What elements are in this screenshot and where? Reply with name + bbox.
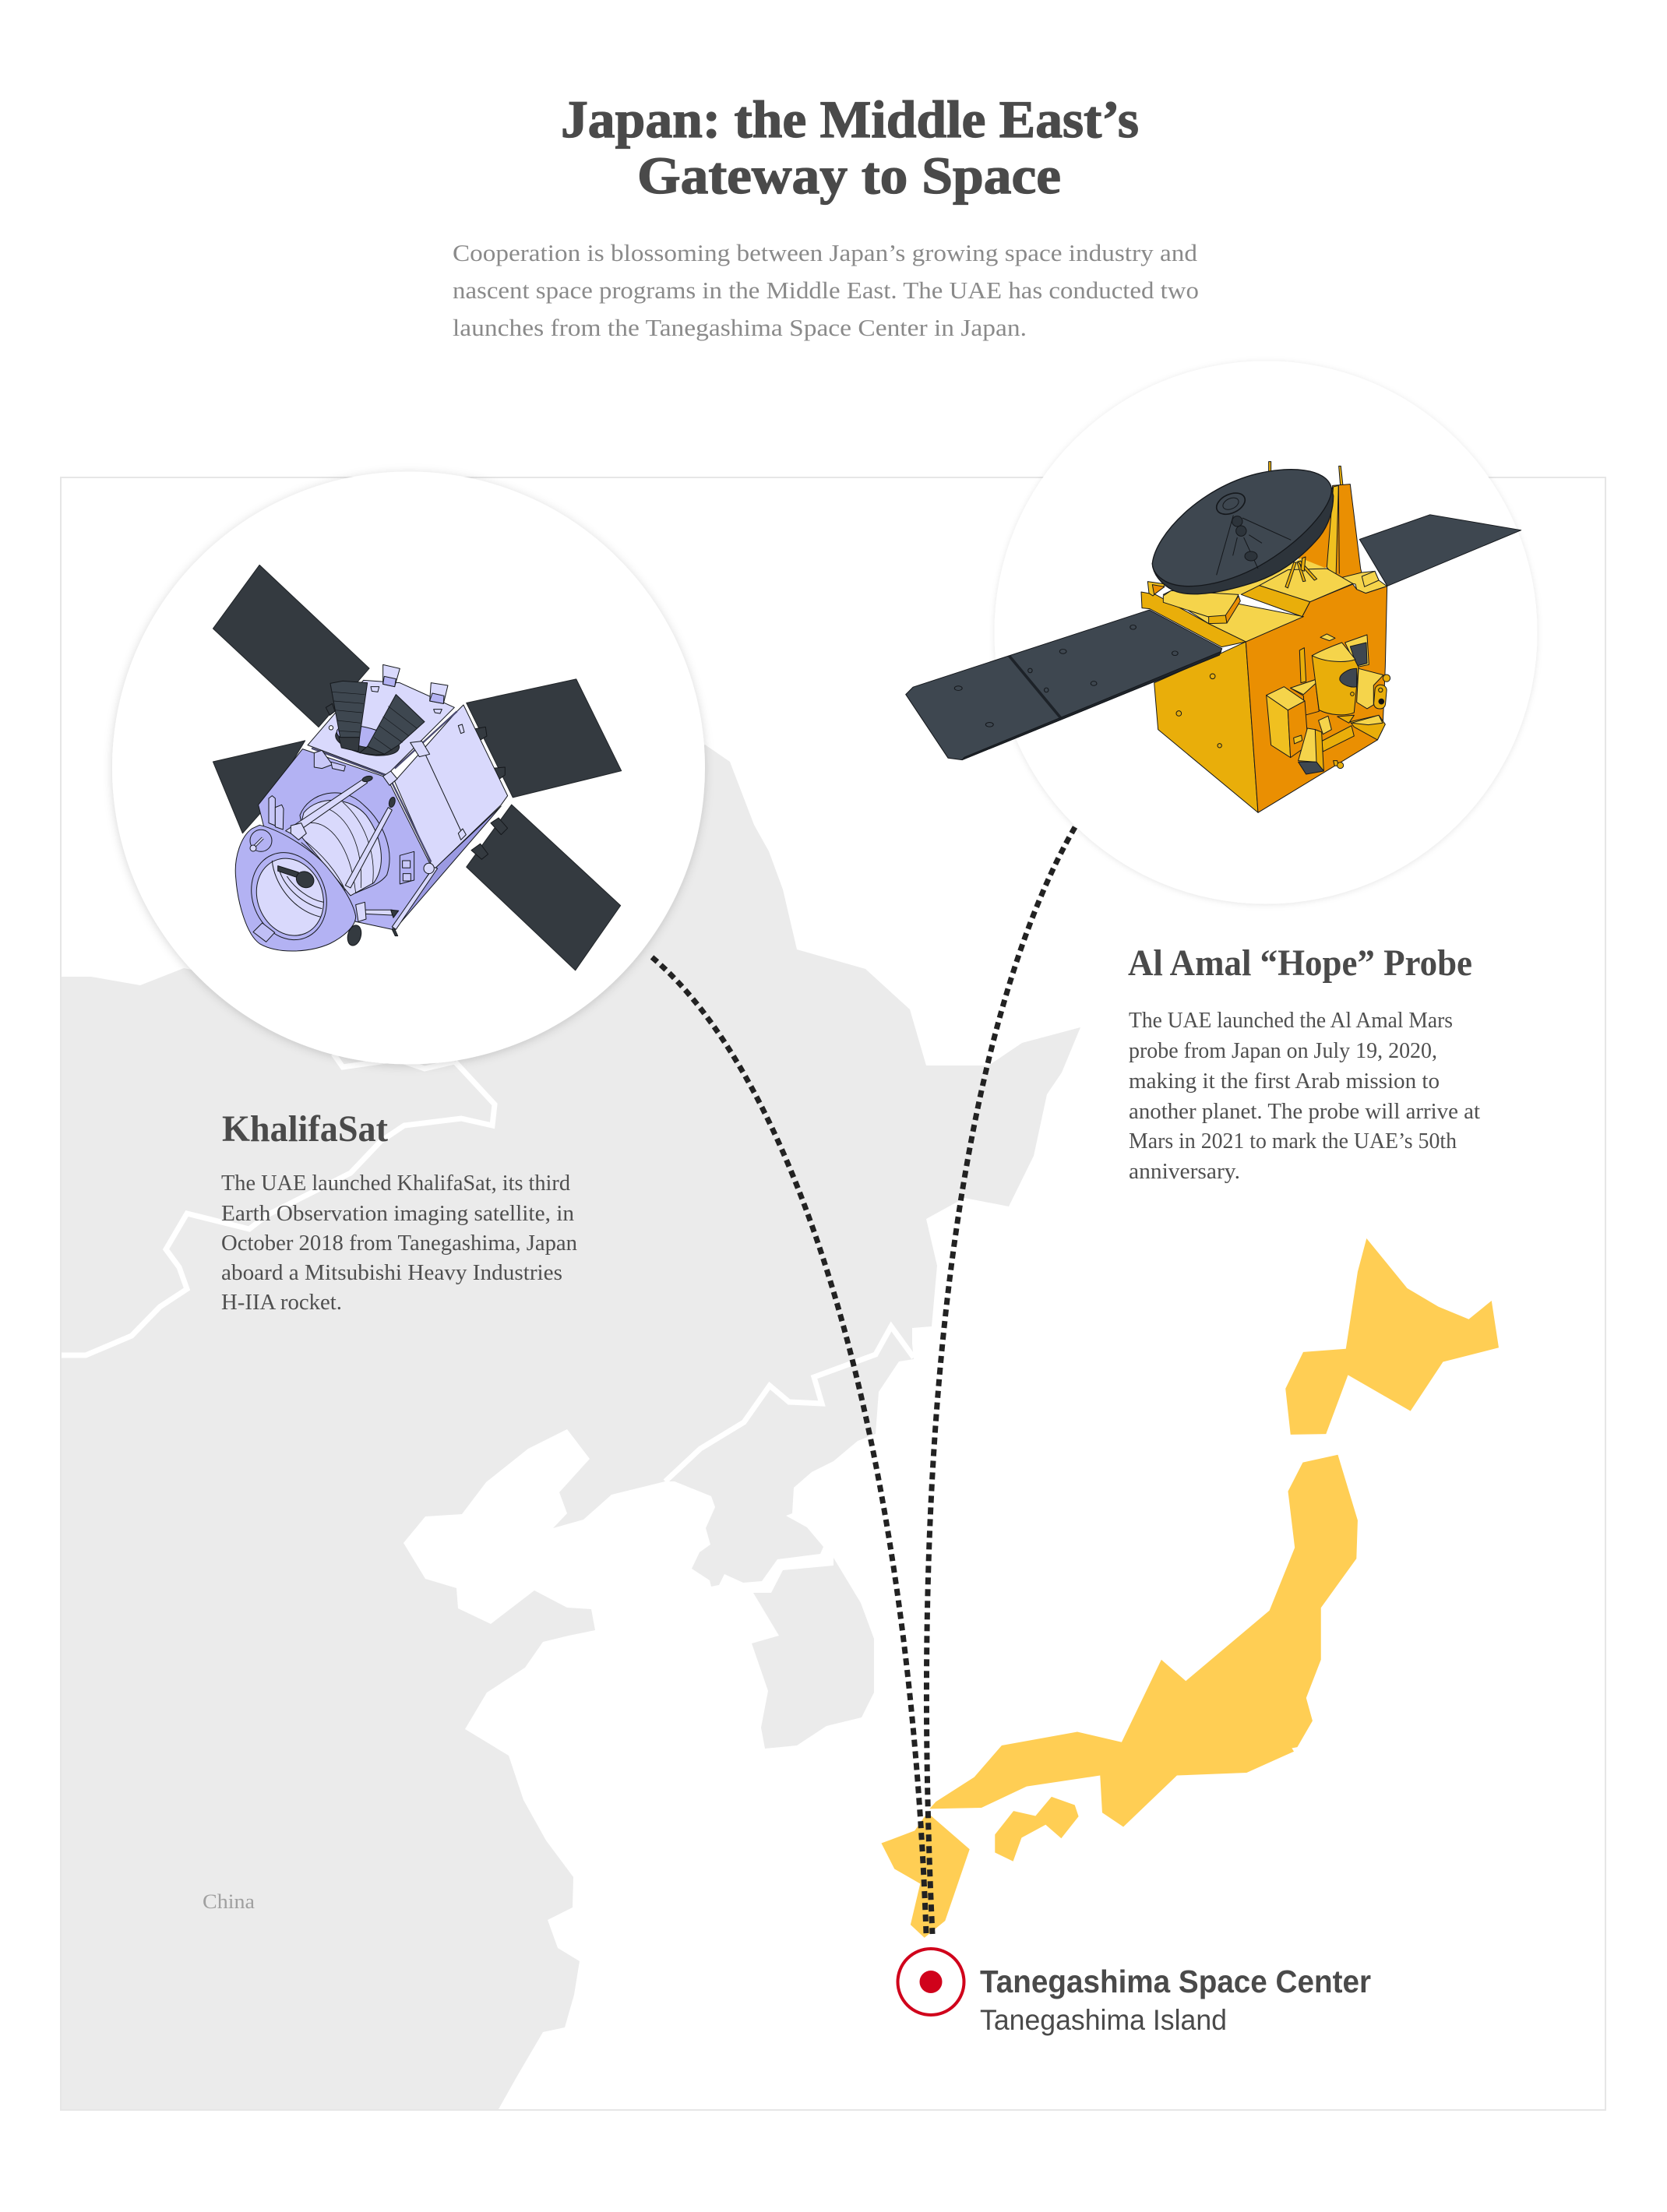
telescope aperture [333,722,402,761]
intro text: launches from the Tanegashima Space Center in Japan. [453,314,1027,341]
Al Amal body text: anniversary. [1129,1159,1240,1184]
holes [1210,674,1215,679]
front flange [235,825,356,951]
Al Amal body text: making it the first Arab mission to [1129,1069,1440,1094]
intro text: Cooperation is blossoming between Japan’s growing space industry and [453,239,1198,266]
launch site label: Tanegashima Space Center [980,1964,1371,1999]
Al Amal heading: Al Amal “Hope” Probe [1128,942,1472,984]
map panel [61,477,1605,2110]
KhalifaSat body text [221,1171,577,1315]
solar panels [213,565,622,970]
Al Amal body text: probe from Japan on July 19, 2020, [1129,1038,1437,1063]
Al Amal body text: The UAE launched the Al Amal Mars [1129,1008,1453,1033]
barrel [300,793,389,893]
circle: Al Amal background [994,361,1538,903]
intro text: nascent space programs in the Middle East. The UAE has conducted two [453,276,1199,304]
launch site marker [897,1949,964,2015]
Al Amal body text [1129,1008,1480,1184]
KhalifaSat body text: The UAE launched KhalifaSat, its third [221,1171,570,1196]
KhalifaSat body text: H-IIA rocket. [221,1290,342,1315]
instruments [1320,634,1335,641]
right solar panel [1359,515,1521,586]
Al Amal body text: another planet. The probe will arrive at [1129,1099,1480,1124]
map: South Korea land [752,1558,874,1749]
equipment box [400,851,414,884]
launch site label [980,1964,1371,2036]
map: China, Russia, North Korea land [62,745,1080,2109]
KhalifaSat body text: aboard a Mitsubishi Heavy Industries [221,1260,562,1285]
icon: Al Amal Hope probe [906,462,1521,812]
intro text [453,239,1199,341]
title [561,90,1139,205]
struts [1285,562,1296,588]
KhalifaSat body text: October 2018 from Tanegashima, Japan [221,1231,577,1256]
side tubes [269,796,275,826]
launch site label: Tanegashima Island [980,2004,1227,2036]
China label: China [203,1890,255,1913]
trajectory: Al Amal dashed arc [926,827,1075,1934]
radiators [339,738,360,752]
satellite body [235,664,508,951]
Al Amal body text: Mars in 2021 to mark the UAE’s 50th [1129,1129,1457,1154]
icon: KhalifaSat satellite [213,565,622,970]
title: Japan: the Middle East’s [561,90,1139,149]
map: country borders [62,1054,914,1481]
trajectory: KhalifaSat dashed arc [652,957,926,1934]
circle: KhalifaSat background [112,472,705,1064]
KhalifaSat body text: Earth Observation imaging satellite, in [221,1201,574,1226]
title: Gateway to Space [637,146,1061,205]
KhalifaSat heading: KhalifaSat [222,1108,388,1150]
left solar panel [906,610,1222,760]
dish [1152,470,1334,594]
wart and antenna [314,750,333,769]
probe body [1141,462,1390,812]
map: Japan [881,1238,1499,1938]
